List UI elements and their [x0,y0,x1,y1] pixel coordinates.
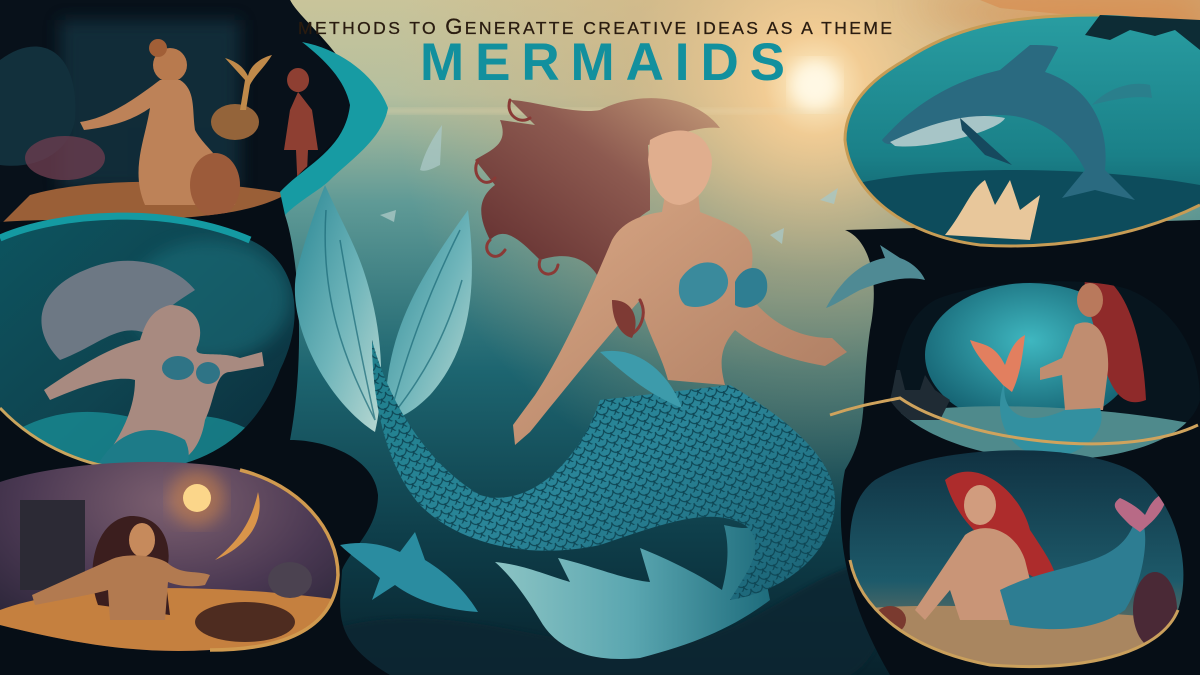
coral [1133,572,1177,648]
city ruins [885,370,950,420]
gold edge: bottom-left panel [210,470,338,650]
treasure pile [195,602,295,642]
small fish [380,125,838,244]
teal edge: left panel [0,216,250,240]
head [648,130,712,205]
curls [476,100,643,335]
small dolphin centre-right [826,245,925,308]
panel: bottom-right scene [850,450,1184,666]
icon: tail motif [225,55,272,110]
gold edge: left panel [0,408,150,470]
figure: reclining mermaid [915,472,1168,629]
tail [372,340,835,600]
icon: large dolphin [882,45,1135,200]
teal swoosh edge [280,42,388,215]
body [513,190,847,445]
coral splash [945,180,1040,240]
figure: shell top [162,356,194,380]
subtitle text: METHODS TO GENERATTE CREATIVE IDEAS AS A THEME [298,14,892,39]
lower tail fluke [495,525,770,659]
figure: red-haired mermaid [970,272,1146,458]
gold edge: top-right panel [845,15,1200,246]
figure: kneeling mermaid [80,39,259,217]
back tail fins [295,185,381,432]
icon: moon glow [169,470,225,526]
figure: hair [41,261,195,360]
icon: crescent [215,492,260,560]
main heading: MERMAIDS [420,33,785,92]
gold edge: mid-right panel [830,398,1198,444]
tail hip fin [600,351,682,408]
panel: top-left scene [0,0,318,222]
distant rocks [1085,15,1200,50]
icon: small dolphin [1092,84,1152,105]
shell top [679,262,767,308]
gold edge: bottom-right panel [850,560,1178,667]
panel: mid-right lagoon scene [890,282,1186,458]
figure: body [44,305,264,470]
hair [475,98,720,280]
main mermaid [295,98,847,659]
shoulder lock [612,300,636,338]
panel: bottom-left study scene [0,462,336,651]
swimming dolphin bottom-centre [340,532,478,612]
panel: left swimming mermaid [0,220,295,464]
panel: top-right dolphin scene [846,15,1200,244]
figure: seated mermaid [32,516,210,620]
figure: small standing [284,68,318,176]
